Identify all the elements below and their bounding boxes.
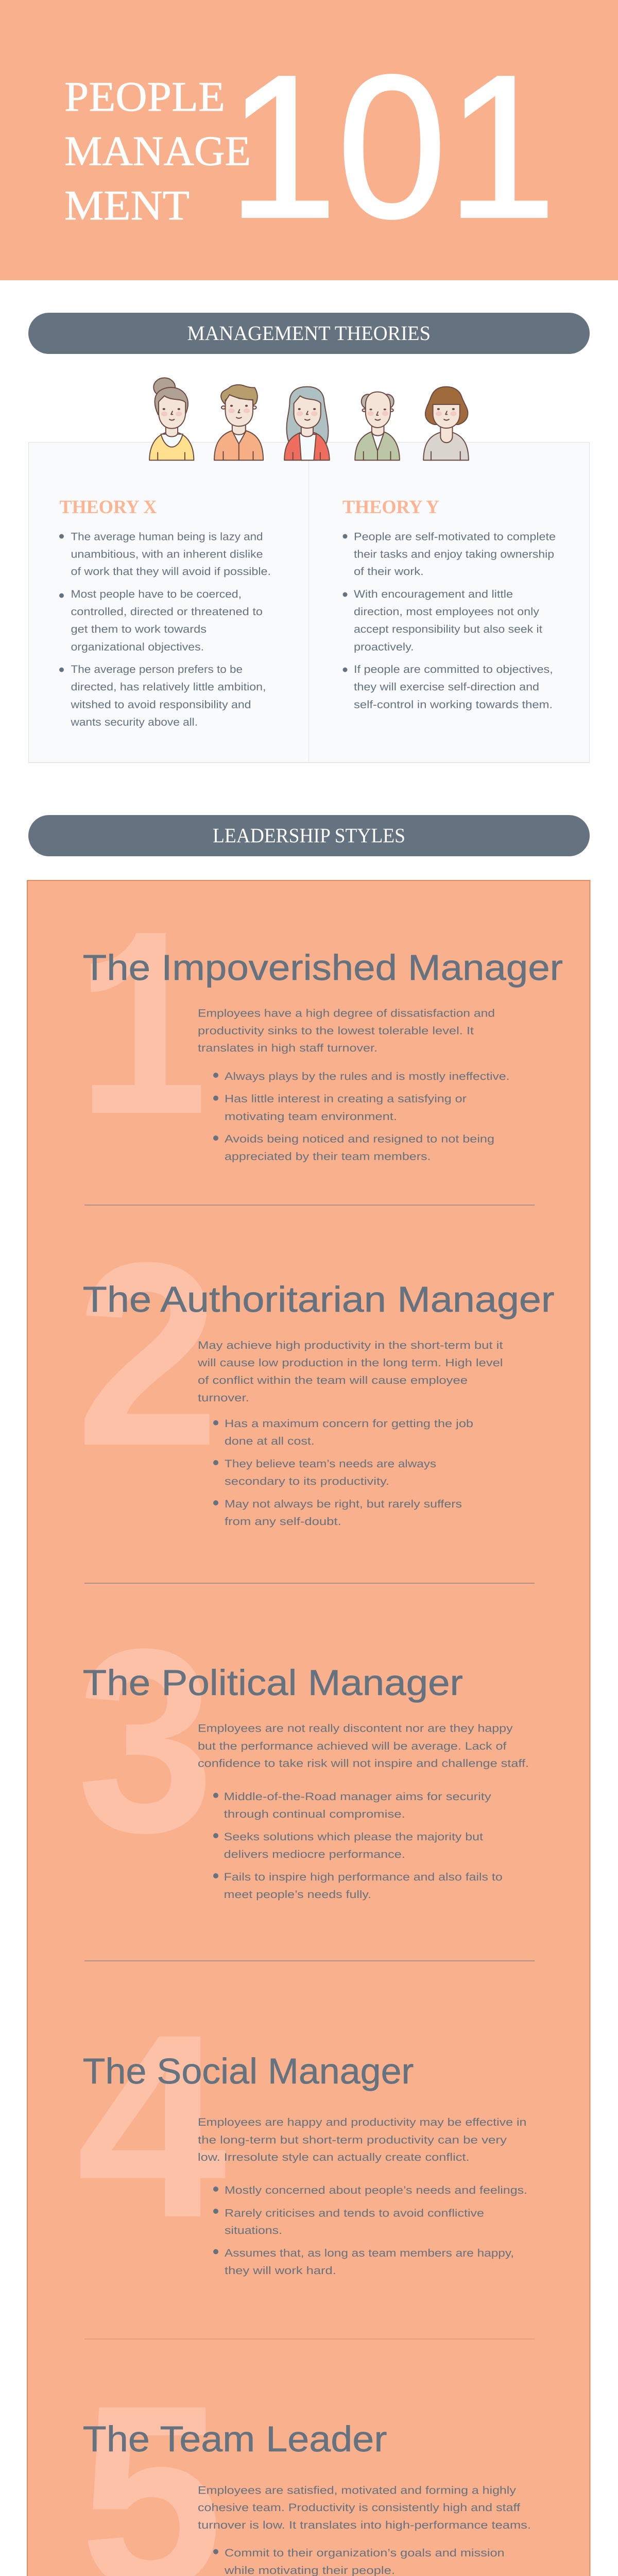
description: Employees are satisfied, motivated and forming a highly <box>198 2484 516 2497</box>
bullet list: Commit to their organization’s goals and mission <box>225 2547 505 2559</box>
heading: The Impoverished Manager <box>83 947 563 988</box>
list: theory x: The average human being is lazy and <box>71 531 263 543</box>
description <box>197 1340 503 1404</box>
big number 4: 4 <box>71 1990 233 2299</box>
list: theory y <box>343 531 556 711</box>
style 1: the impoverished manager <box>76 886 563 1195</box>
list: theory x: unambitious, with an inherent dislike <box>71 548 263 561</box>
list: theory x: get them to work towards <box>71 623 207 635</box>
description: Employees are happy and productivity may be effective in <box>198 2116 526 2128</box>
icon: woman with long grey hair <box>284 387 330 460</box>
bullet list: Middle-of-the-Road manager aims for security <box>224 1791 491 1803</box>
list: theory y: their tasks and enjoy taking ownership <box>354 548 554 561</box>
title number 101: 101 <box>228 32 556 260</box>
description: low. Irresolute style can actually create conflict. <box>198 2151 470 2163</box>
list: theory y: they will exercise self-direction and <box>354 681 539 693</box>
bullet list: Fails to inspire high performance and also fails to <box>224 1871 503 1883</box>
list: theory y: With encouragement and little <box>354 588 513 600</box>
style 4: the social manager <box>71 1990 527 2299</box>
description: productivity sinks to the lowest tolerable level. It <box>198 1025 474 1037</box>
description: will cause low production in the long term. High level <box>197 1357 503 1369</box>
bullet list: meet people’s needs fully. <box>224 1889 371 1901</box>
icon: team of five people <box>149 378 469 460</box>
description: turnover. <box>198 1392 249 1404</box>
panel: leadership styles <box>27 880 590 2576</box>
style 5: the team leader <box>75 2361 531 2576</box>
description: confidence to take risk will not inspire and challenge staff. <box>198 1758 529 1770</box>
bullet list <box>213 1418 473 1528</box>
bullet list: Seeks solutions which please the majority but <box>224 1831 483 1843</box>
section heading: management theories <box>28 313 590 354</box>
section heading: management theories: MANAGEMENT THEORIES <box>187 321 431 345</box>
list: theory x <box>59 531 271 728</box>
bullet list: through continual compromise. <box>224 1808 405 1820</box>
list: theory x: controlled, directed or threatened to <box>71 606 263 618</box>
bullet list: Mostly concerned about people’s needs and feelings. <box>225 2184 527 2196</box>
bullet list: delivers mediocre performance. <box>224 1849 405 1860</box>
list: theory x: Most people have to be coerced, <box>71 588 242 600</box>
style 2: the authoritarian manager <box>69 1218 555 1528</box>
bullet list <box>213 2547 507 2576</box>
description <box>198 1722 529 1770</box>
header banner <box>0 0 618 280</box>
description <box>198 2484 531 2531</box>
bullet list: from any self-doubt. <box>225 1516 341 1528</box>
list: theory x: of work that they will avoid if possible. <box>71 566 271 578</box>
title: People Management <box>64 73 251 229</box>
bullet list <box>213 1071 510 1162</box>
heading: theory x: THEORY X <box>60 497 157 518</box>
bullet list: May not always be right, but rarely suffers <box>225 1498 462 1510</box>
style 3: the political manager <box>72 1604 529 1913</box>
bullet list: situations. <box>225 2225 282 2236</box>
title: People Management: MENT <box>64 182 190 229</box>
bullet list: they will work hard. <box>225 2265 336 2277</box>
title: People Management: PEOPLE <box>64 73 225 120</box>
description: May achieve high productivity in the short-term but it <box>198 1340 503 1351</box>
list: theory x: organizational objectives. <box>71 641 204 653</box>
list: theory x: The average person prefers to be <box>71 664 243 675</box>
bullet list: Has little interest in creating a satisfying or <box>225 1093 467 1105</box>
title: People Management: MANAGE <box>64 128 251 174</box>
description: Employees have a high degree of dissatisfaction and <box>198 1008 495 1020</box>
list: theory x: wants security above all. <box>70 717 198 728</box>
description: of conflict within the team will cause employee <box>198 1375 468 1386</box>
description: cohesive team. Productivity is consistently high and staff <box>198 2502 520 2514</box>
heading: The Political Manager <box>83 1663 463 1703</box>
bullet list: motivating team environment. <box>225 1111 397 1123</box>
bullet list: Has a maximum concern for getting the job <box>225 1418 473 1430</box>
bullet list: Always plays by the rules and is mostly ineffective. <box>225 1071 510 1082</box>
icon: man with blond hair <box>214 385 263 460</box>
heading: The Team Leader <box>83 2419 387 2459</box>
bullet list: appreciated by their team members. <box>225 1151 431 1162</box>
list: theory x: directed, has relatively little ambition, <box>71 681 266 693</box>
heading: The Social Manager <box>83 2051 414 2091</box>
icon: woman with brown bob <box>423 387 469 460</box>
bullet list <box>213 1791 503 1901</box>
big number 2: 2 <box>69 1218 225 1527</box>
list: theory y: accept responsibility but also seek it <box>354 623 542 635</box>
bullet list: Assumes that, as long as team members are happy, <box>225 2247 514 2259</box>
bullet list: They believe team’s needs are always <box>225 1458 436 1470</box>
bullet list: secondary to its productivity. <box>225 1476 389 1487</box>
heading: The Authoritarian Manager <box>83 1279 555 1319</box>
description: turnover is low. It translates into high-performance teams. <box>198 2519 531 2531</box>
list: theory y: direction, most employees not only <box>354 606 540 618</box>
icon: woman with bun <box>149 378 194 460</box>
bullet list: Rarely criticises and tends to avoid conflictive <box>225 2207 484 2219</box>
description: translates in high staff turnover. <box>198 1042 377 1054</box>
big number 3: 3 <box>72 1604 218 1913</box>
list: theory y: proactively. <box>354 641 414 653</box>
list: theory y: of their work. <box>354 566 424 578</box>
list: theory x: witshed to avoid responsibility and <box>70 699 251 711</box>
list: theory y: People are self-motivated to complete <box>354 531 556 543</box>
section heading: leadership styles <box>28 815 590 856</box>
description <box>198 1008 495 1054</box>
description: the long-term but short-term productivity can be very <box>198 2134 507 2146</box>
description: Employees are not really discontent nor are they happy <box>198 1722 513 1734</box>
list: theory y: If people are committed to objectives, <box>354 664 553 675</box>
big number 1: 1 <box>76 886 211 1195</box>
description: but the performance achieved will be average. Lack of <box>198 1740 507 1752</box>
bullet list: Avoids being noticed and resigned to not being <box>225 1133 494 1145</box>
bullet list: done at all cost. <box>225 1435 315 1447</box>
list: theory y: self-control in working towards them. <box>354 699 553 711</box>
description <box>198 2116 526 2163</box>
icon: older bald man <box>355 392 400 460</box>
section heading: leadership styles: LEADERSHIP STYLES <box>213 824 405 847</box>
panel: theories <box>28 442 590 763</box>
bullet list <box>213 2184 527 2277</box>
heading: theory y: THEORY Y <box>342 497 439 518</box>
